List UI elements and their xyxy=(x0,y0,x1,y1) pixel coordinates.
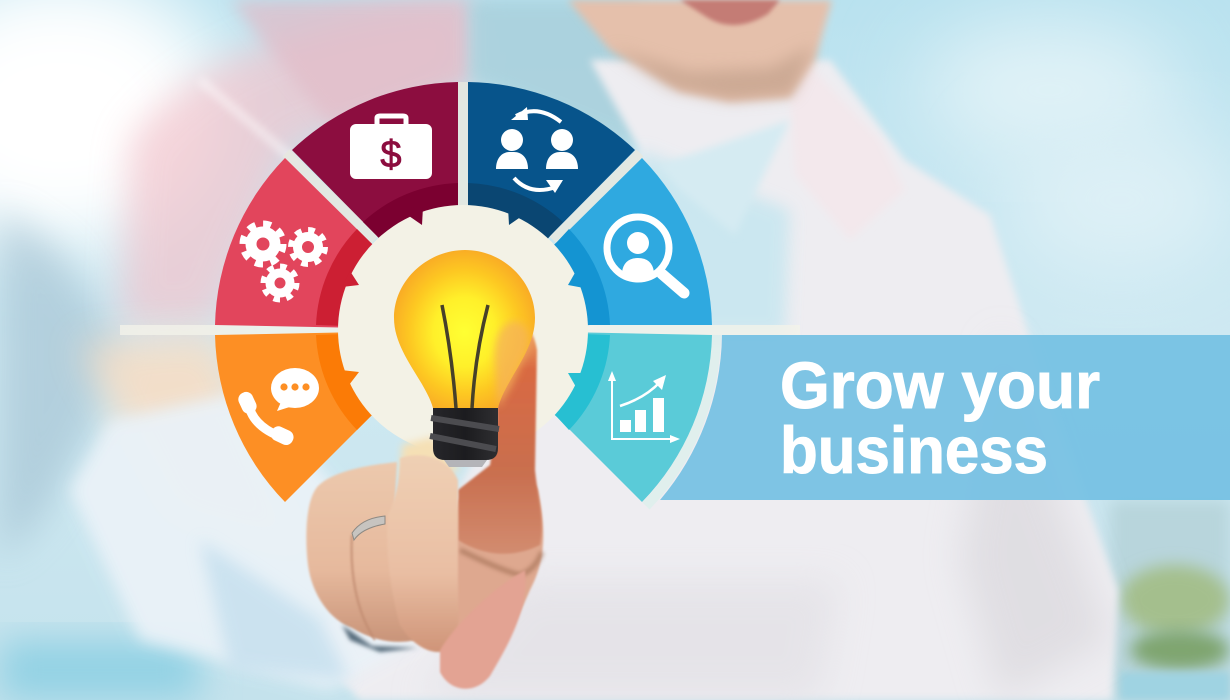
diagonal light streak xyxy=(200,80,300,165)
pointing hand xyxy=(306,323,543,689)
icon: briefcase with dollar sign xyxy=(350,116,432,179)
glass xyxy=(394,250,535,408)
wheel diagram xyxy=(215,82,712,502)
sleeve blue shade xyxy=(200,540,350,680)
segment: search blue xyxy=(463,158,712,330)
glow at top of hand xyxy=(400,437,460,480)
icon: rising bar chart xyxy=(608,371,680,443)
stubble xyxy=(610,45,815,100)
pink lens overlay xyxy=(80,0,640,560)
light bulb xyxy=(394,250,535,467)
segment: growth teal xyxy=(463,330,712,502)
icon: briefcase with dollar sign: $ xyxy=(380,134,402,176)
icon: three gears xyxy=(243,224,325,300)
segment: team navy xyxy=(468,82,635,330)
shirt shading xyxy=(960,330,1112,700)
collar xyxy=(790,60,905,240)
web crease xyxy=(460,550,542,575)
central gear xyxy=(338,205,588,455)
finger crease xyxy=(352,535,375,640)
thumb xyxy=(440,570,526,689)
index finger xyxy=(458,323,542,554)
pale outer ring xyxy=(646,335,716,506)
segment: finance briefcase xyxy=(292,82,458,330)
filaments xyxy=(442,305,488,408)
segment: communication orange xyxy=(215,330,463,502)
face and neck xyxy=(568,0,832,102)
shirt cuff shadow xyxy=(342,625,418,652)
icon: magnifier with person xyxy=(607,217,684,293)
lips xyxy=(680,0,780,25)
horizontal light divider xyxy=(120,325,800,335)
ring xyxy=(352,516,385,540)
banner heading: business xyxy=(780,413,1048,487)
blue tinted shirt panel xyxy=(600,150,790,335)
segment: operations gears xyxy=(215,158,463,330)
knuckles and ring finger xyxy=(306,462,415,642)
banner heading: Grow your xyxy=(780,348,1100,422)
palm xyxy=(440,479,543,670)
icon: phone and speech bubble xyxy=(236,368,319,447)
screw base xyxy=(433,408,498,460)
middle finger xyxy=(387,455,458,652)
shirt torso xyxy=(300,60,1118,700)
fingertip glow through glass xyxy=(495,321,529,408)
sleeve xyxy=(70,390,420,690)
pale gaps between segments xyxy=(286,82,640,240)
icon: two people with rotating arrows xyxy=(496,107,578,193)
banner xyxy=(660,335,1230,500)
